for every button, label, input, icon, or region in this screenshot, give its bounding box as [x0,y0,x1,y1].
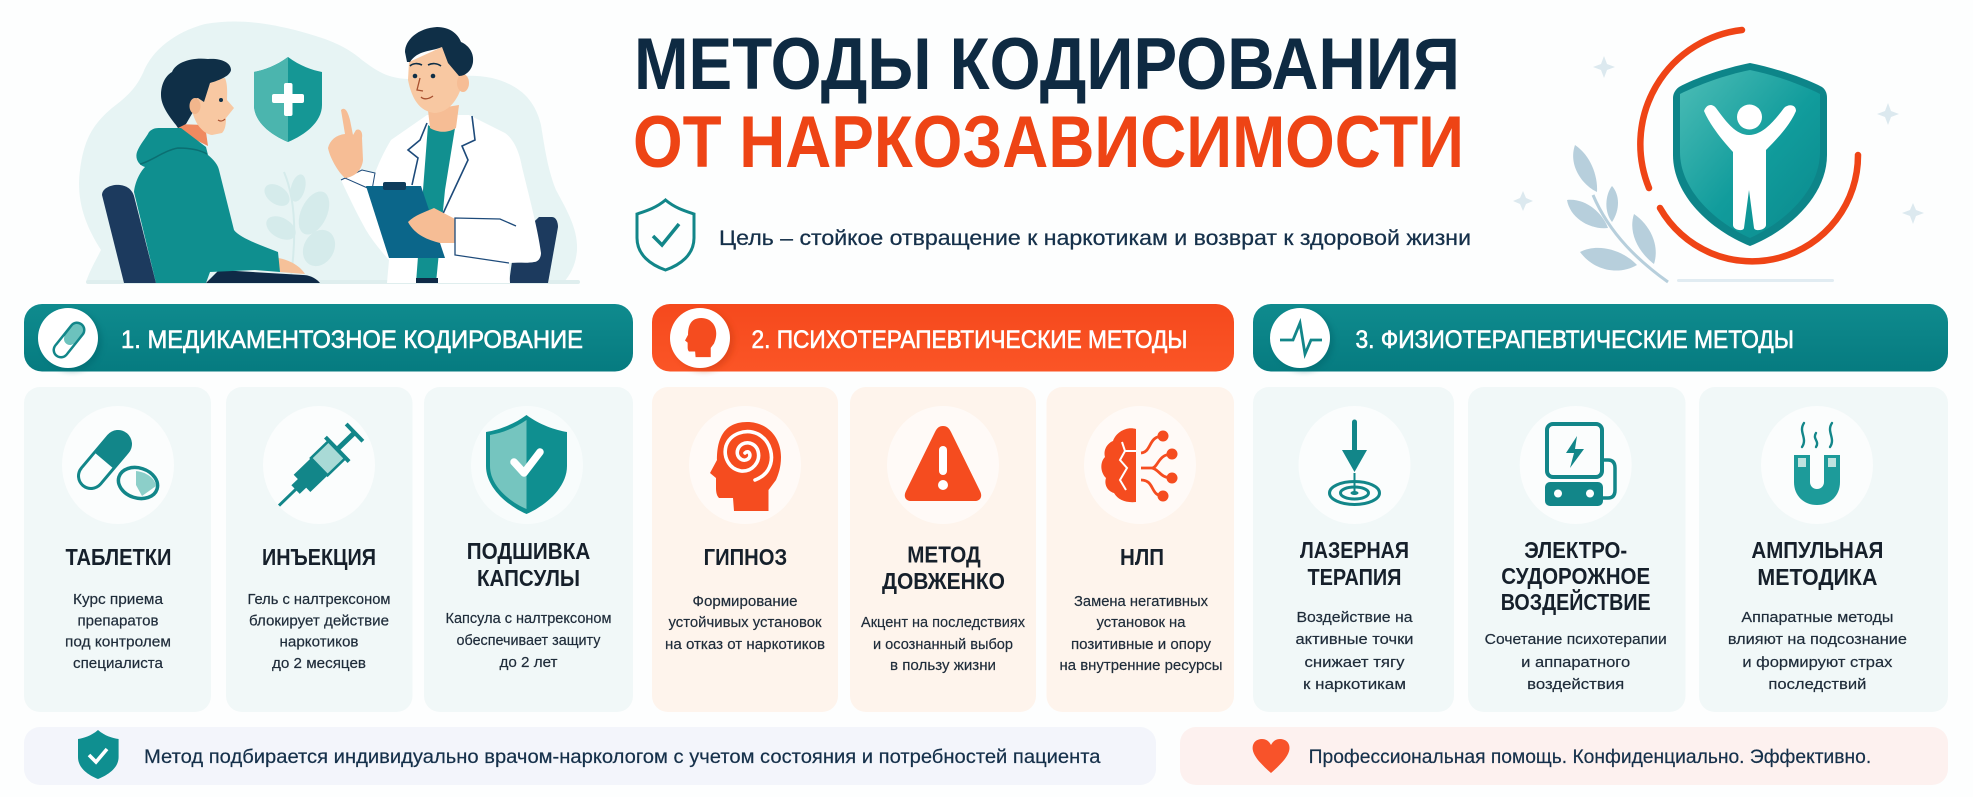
title: ОТ НАРКОЗАВИСИМОСТИ [633,102,1464,183]
card: метод довженко: и осознанный выбор [873,636,1013,653]
card: гипноз: на отказ от наркотиков [665,636,825,653]
card: нлп: установок на [1096,614,1186,631]
card: лазерная терапия: активные точки [1296,631,1414,648]
card: таблетки: Курс приема [73,591,164,608]
card: таблетки: под контролем [65,634,171,650]
card: инъекция: до 2 месяцев [272,655,366,672]
doctor [328,27,558,283]
card: метод довженко: ДОВЖЕНКО [882,568,1005,594]
card: электросудорожное воздействие: Сочетание психотерапии [1485,631,1667,648]
card: ампульная методика: и формируют страх [1742,654,1893,671]
card: лазерная терапия: снижает тягу [1304,654,1405,671]
icon: warning triangle [905,426,981,501]
card: инъекция: Гель с налтрексоном [248,591,390,608]
card: метод довженко: в пользу жизни [890,657,996,674]
card: метод довженко: Акцент на последствиях [861,614,1025,631]
icon: magnet with waves [1794,423,1840,505]
card: лазерная терапия: ЛАЗЕРНАЯ [1300,537,1409,563]
icon: outlined shield with check [637,200,694,270]
footer note: individual selection: Метод подбирается индивидуально врачом-наркологом с учетом состояния и потребностей пациента [144,747,1101,768]
icon: electro device [1545,424,1615,506]
card: инъекция [226,387,412,712]
section 1 header [24,304,633,372]
emblem: shield with person [1513,30,1924,282]
section 3 header [1253,304,1948,372]
shield with plus [254,57,322,142]
section 2 header [652,304,1234,372]
card: электросудорожное воздействие: ЭЛЕКТРО- [1524,537,1627,563]
card: электросудорожное воздействие: ВОЗДЕЙСТВИЕ [1501,588,1651,615]
card: инъекция: блокирует действие [249,612,389,630]
section 1 heading: 1. МЕДИКАМЕНТОЗНОЕ КОДИРОВАНИЕ [121,326,583,354]
illustration: doctor and patient [79,22,580,284]
card: лазерная терапия: к наркотикам [1303,676,1406,693]
leaf branch [1567,145,1668,282]
icon: head badge [670,308,734,371]
title [633,24,1464,183]
card: подшивка капсулы [424,387,633,712]
person [1704,104,1796,230]
card: ампульная методика [1699,387,1948,712]
card: подшивка капсулы: обеспечивает защиту [456,632,601,649]
card: электросудорожное воздействие [1468,387,1686,712]
icon: shield with check [486,415,567,514]
card: ампульная методика: Аппаратные методы [1741,609,1893,626]
icon: brain with circuit [1101,428,1178,502]
icon: pulse badge [1270,308,1334,371]
card: ампульная методика: АМПУЛЬНАЯ [1751,537,1883,563]
card: электросудорожное воздействие: и аппаратного [1521,654,1630,671]
card: инъекция: ИНЪЕКЦИЯ [262,544,376,570]
card: ампульная методика: МЕТОДИКА [1757,564,1877,590]
card: таблетки: ТАБЛЕТКИ [66,544,172,570]
card: ампульная методика: влияют на подсознание [1728,631,1907,648]
goal text: Цель – стойкое отвращение к наркотикам и возврат к здоровой жизни [719,227,1471,250]
card: нлп [1046,387,1234,712]
card: лазерная терапия: Воздействие на [1296,609,1413,626]
card: метод довженко [850,387,1036,712]
section 2 heading: 2. ПСИХОТЕРАПЕВТИЧЕСКИЕ МЕТОДЫ [752,326,1188,354]
card: метод довженко: МЕТОД [907,542,981,568]
icon: capsule badge [38,308,102,371]
card: ампульная методика: последствий [1768,676,1866,693]
card: подшивка капсулы: ПОДШИВКА [467,538,590,564]
card: нлп: Замена негативных [1074,593,1208,610]
icon: heart [1253,739,1290,773]
background blob [79,22,577,282]
card: таблетки: препаратов [78,612,159,630]
card: электросудорожное воздействие: СУДОРОЖНОЕ [1501,563,1650,589]
card: гипноз [652,387,838,712]
shield [1673,63,1827,246]
title: МЕТОДЫ КОДИРОВАНИЯ [634,24,1460,105]
icon: syringe [267,420,366,518]
footer note: professional help [1180,727,1948,785]
icon: small shield [78,730,119,779]
card: гипноз: Формирование [692,593,798,610]
card: подшивка капсулы: Капсула с налтрексоном [446,610,612,627]
icon: pills [80,444,162,503]
card: нлп: на внутренние ресурсы [1060,657,1222,674]
plant [260,172,341,283]
card: таблетки: специалиста [73,655,164,672]
footer note: professional help: Профессиональная помощь. Конфиденциально. Эффективно. [1309,747,1871,768]
card: нлп: НЛП [1120,544,1164,570]
card: электросудорожное воздействие: воздействия [1527,676,1624,693]
card: таблетки [24,387,211,712]
red ring arcs [1640,30,1858,261]
icon: laser target [1330,422,1380,504]
patient [102,59,320,283]
footer note: individual selection [24,727,1156,785]
card: подшивка капсулы: КАПСУЛЫ [477,565,580,591]
card: гипноз: ГИПНОЗ [704,544,787,570]
card: инъекция: наркотиков [280,634,359,650]
section 3 heading: 3. ФИЗИОТЕРАПЕВТИЧЕСКИЕ МЕТОДЫ [1356,326,1794,354]
sparkles [1513,56,1924,224]
card: гипноз: устойчивых установок [668,614,822,631]
card: лазерная терапия [1253,387,1454,712]
card: нлп: позитивные и опору [1071,636,1211,653]
card: подшивка капсулы: до 2 лет [500,654,558,671]
card: лазерная терапия: ТЕРАПИЯ [1308,564,1402,590]
goal statement [637,200,1471,270]
icon: head with spiral [710,422,781,511]
